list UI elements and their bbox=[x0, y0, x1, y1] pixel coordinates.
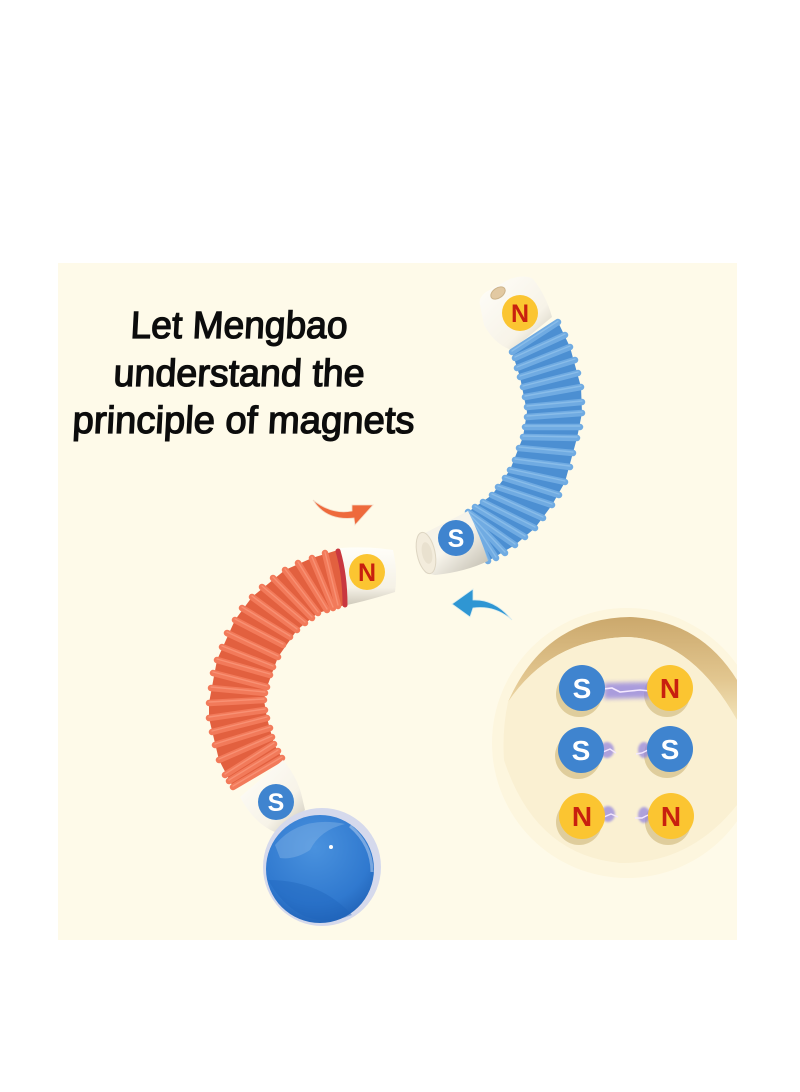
pole pair: S attracts N: N bbox=[660, 673, 680, 704]
inset crescent shadow bbox=[508, 617, 737, 720]
badge: N on blue tube: N bbox=[511, 300, 529, 328]
blue arrow bbox=[452, 589, 512, 620]
orange arrow bbox=[313, 500, 373, 525]
inset circle: magnetic pole interactions bbox=[492, 608, 762, 878]
red tube magnet bbox=[209, 547, 396, 833]
badge: S on blue tube: S bbox=[448, 525, 464, 553]
title bbox=[72, 305, 416, 442]
title: principle of magnets bbox=[72, 400, 416, 442]
red tube cap: S end bbox=[240, 760, 305, 833]
pole pair: S repels S: S bbox=[572, 735, 590, 766]
blue tube cap: S end bbox=[413, 511, 488, 575]
pole pair: S attracts N: S bbox=[573, 673, 591, 704]
pole pair: N repels N: N bbox=[661, 801, 681, 832]
red tube cap: N end bbox=[340, 547, 396, 605]
inset inner disc bbox=[504, 637, 737, 863]
blue ball bbox=[263, 808, 381, 926]
inset outer ring bbox=[492, 608, 762, 878]
background panel bbox=[58, 263, 737, 940]
badge: S on red tube: S bbox=[268, 789, 284, 817]
title: understand the bbox=[113, 353, 366, 395]
badge: N on red tube: N bbox=[358, 559, 376, 587]
pole pair: N repels N: N bbox=[572, 801, 592, 832]
blue tube body bbox=[468, 321, 582, 561]
pole pair: S repels S bbox=[555, 726, 693, 779]
blue tube magnet bbox=[413, 276, 582, 575]
pole pair: S repels S: S bbox=[661, 734, 679, 765]
badge: N on red tube bbox=[349, 554, 385, 590]
badge: S on blue tube bbox=[438, 520, 474, 556]
badge: N on blue tube bbox=[502, 295, 538, 331]
pole pair: N repels N bbox=[556, 793, 694, 845]
badge: S on red tube bbox=[258, 784, 294, 820]
title: Let Mengbao bbox=[130, 305, 349, 347]
red tube body bbox=[209, 550, 345, 787]
pole pair: S attracts N bbox=[556, 665, 693, 717]
blue tube cap: N end bbox=[480, 276, 552, 350]
